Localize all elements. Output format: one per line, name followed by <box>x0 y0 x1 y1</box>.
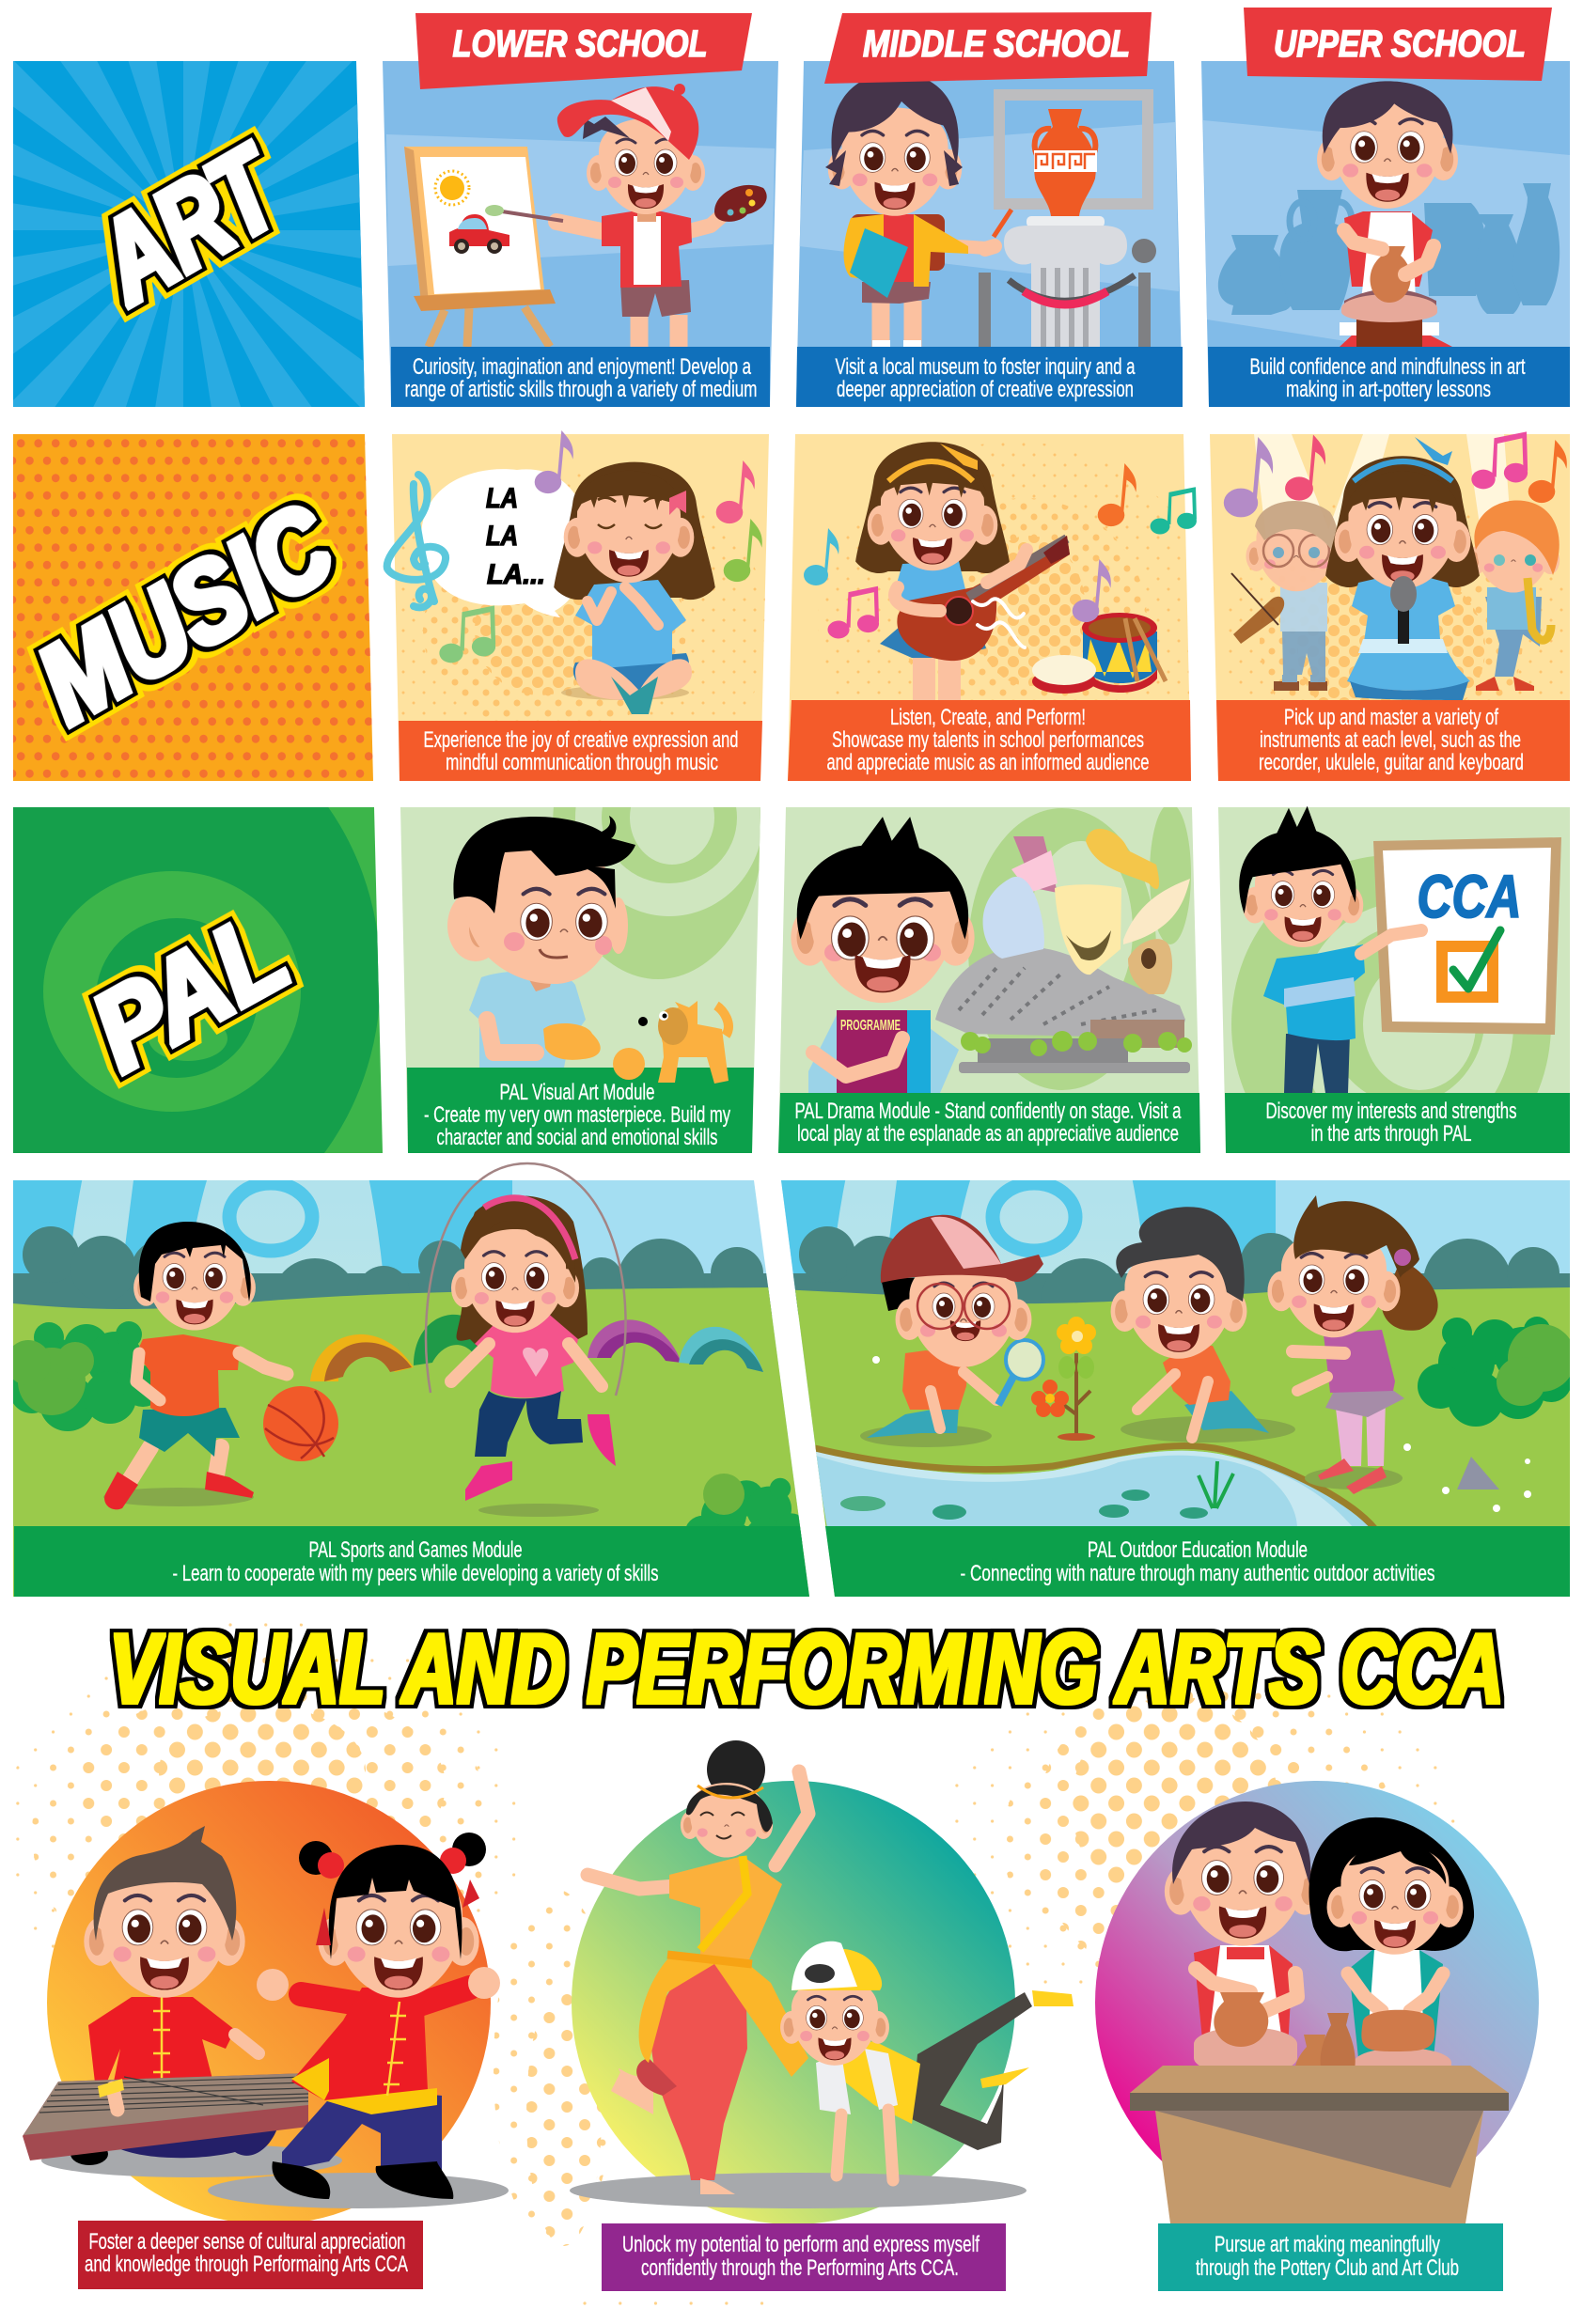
caption: PAL outdoor education: PAL Outdoor Education Module <box>1088 1537 1308 1563</box>
caption: middle school art: deeper appreciation of creative expression <box>837 377 1134 402</box>
figure: singing girl <box>554 462 715 714</box>
panel: PAL outdoor education <box>781 1180 1570 1597</box>
icon: speech bubble LA LA LA: LA <box>486 483 518 514</box>
caption: PAL sports and games: PAL Sports and Games Module <box>308 1537 523 1563</box>
icon: easel with painting <box>404 147 556 347</box>
caption: cultural appreciation: Foster a deeper sense of cultural appreciation <box>88 2229 406 2254</box>
figure: boy with clay <box>447 816 635 1068</box>
figure: girl skipping rope <box>426 1163 626 1517</box>
figure: boy with magnifier <box>860 1215 1043 1447</box>
banner: lower school: LOWER SCHOOL <box>453 23 707 65</box>
panel: pottery club <box>1062 1781 1560 2291</box>
figure: boy with programme <box>791 817 975 1093</box>
panel: PAL drama <box>776 803 1204 1155</box>
panel: lower school art <box>376 13 780 407</box>
figure: boy painting <box>485 84 767 350</box>
icon: clay dog and ball <box>613 1001 729 1084</box>
caption: cultural appreciation <box>78 2221 423 2289</box>
figure: boy with basketball <box>103 1222 338 1509</box>
heading: ART: ART <box>74 119 306 330</box>
figure: boy with saxophone <box>1467 500 1559 691</box>
panel: music instruments <box>1208 431 1579 789</box>
caption: pottery club: Pursue art making meaningfully <box>1215 2232 1440 2257</box>
icon: plant with flowers <box>1031 1317 1096 1441</box>
caption: PAL sports and games <box>14 1526 809 1597</box>
caption: cultural appreciation: and knowledge through Performaing Arts CCA <box>85 2252 408 2277</box>
panel: middle school art <box>794 12 1184 407</box>
caption: performing arts potential <box>602 2223 1006 2291</box>
caption: PAL visual art: PAL Visual Art Module <box>500 1080 654 1105</box>
caption: PAL drama: local play at the esplanade as an appreciative audience <box>797 1121 1179 1146</box>
icon: treble clef <box>387 475 446 607</box>
icon: drum and tambourine <box>1032 613 1166 694</box>
caption: PAL sports and games: - Learn to cooperate with my peers while developing a variety of skills <box>173 1561 658 1586</box>
heading: PAL: PAL <box>71 887 307 1096</box>
panel: MUSIC <box>13 434 373 781</box>
banner: upper school <box>1244 8 1552 81</box>
caption: pottery club: through the Pottery Club and Art Club <box>1196 2255 1459 2281</box>
icons: music notes <box>804 463 1197 638</box>
heading: MUSIC: MUSIC <box>17 479 354 748</box>
figure: boy with folder <box>825 72 1011 348</box>
caption: music perform: Showcase my talents in school performances <box>832 727 1144 753</box>
figure: boy with violin <box>1231 501 1347 691</box>
icon: pottery vases and table <box>1062 2013 1560 2237</box>
panel: upper school art <box>1199 8 1575 407</box>
caption: PAL drama <box>778 1093 1200 1153</box>
panel: ART <box>13 61 365 407</box>
figure: boy with programme: PROGRAMME <box>840 1018 901 1034</box>
caption: lower school art: Curiosity, imagination and enjoyment! Develop a <box>413 354 751 380</box>
panel: PAL <box>13 807 383 1153</box>
icon: esplanade and masks <box>935 829 1192 1073</box>
banner: middle school: MIDDLE SCHOOL <box>863 23 1130 65</box>
figure: breakdancing boy <box>780 1942 1074 2180</box>
icons: music notes <box>439 430 762 663</box>
icons: music notes <box>1224 431 1567 517</box>
panel: PAL sports and games <box>13 1162 809 1597</box>
caption: middle school art <box>796 347 1183 407</box>
caption: PAL visual art <box>407 1068 754 1153</box>
caption: music perform: and appreciate music as an informed audience <box>827 750 1149 775</box>
icon: speech bubble LA LA LA: LA <box>486 521 518 552</box>
banner: upper school: UPPER SCHOOL <box>1274 23 1526 65</box>
caption: pottery club <box>1158 2223 1503 2291</box>
caption: lower school art: range of artistic skills through a variety of medium <box>404 377 758 402</box>
banner: lower school <box>415 13 752 89</box>
caption: music perform: Listen, Create, and Perform! <box>890 705 1086 730</box>
caption: upper school art: making in art-pottery lessons <box>1286 377 1491 402</box>
caption: PAL discover: in the arts through PAL <box>1310 1121 1472 1146</box>
chart board: CCA checklist: CCA <box>1418 863 1521 930</box>
figure: boy making pottery <box>1317 81 1458 347</box>
caption: performing arts potential: Unlock my potential to perform and express myself <box>622 2232 980 2257</box>
icon: silhouette vases <box>1218 183 1559 315</box>
caption: PAL outdoor education <box>825 1526 1570 1597</box>
banner: middle school <box>824 12 1152 84</box>
caption: middle school art: Visit a local museum to foster inquiry and a <box>835 354 1136 380</box>
background: halftone dots <box>4 1621 1459 2318</box>
caption: PAL visual art: character and social and emotional skills <box>436 1125 718 1150</box>
panel: performing arts dance <box>570 1740 1074 2291</box>
caption: music experience: mindful communication through music <box>446 750 718 775</box>
caption: music experience: Experience the joy of creative expression and <box>423 727 739 753</box>
figure: boy pointing <box>1230 803 1421 1093</box>
caption: music perform <box>788 700 1191 781</box>
caption: PAL visual art: - Create my very own masterpiece. Build my <box>424 1102 730 1128</box>
icon: museum vase and column <box>979 89 1156 347</box>
panel: music experience <box>357 430 771 789</box>
caption: performing arts potential: confidently through the Performing Arts CCA. <box>641 2255 959 2281</box>
icons: play tunnels <box>310 1315 763 1381</box>
figure: kneeling boy <box>1111 1207 1295 1443</box>
panel: performing arts guzheng <box>23 1781 509 2289</box>
figure: girl in red jacket <box>208 1833 509 2208</box>
caption: upper school art <box>1208 347 1570 407</box>
chart board: CCA checklist <box>1373 837 1561 1035</box>
panel: music perform <box>785 434 1213 799</box>
figure: girl with hair clip <box>1267 1195 1438 1494</box>
figure: girl with guitar <box>855 442 1070 700</box>
figure: boy playing guzheng <box>41 1826 342 2177</box>
caption: music experience <box>399 721 762 781</box>
caption: music instruments <box>1216 700 1570 781</box>
icon: speech bubble LA LA LA <box>421 469 588 617</box>
figure: classical dancer <box>588 1740 808 2194</box>
caption: PAL drama: PAL Drama Module - Stand confidently on stage. Visit a <box>795 1099 1182 1124</box>
figure: girl at potter's wheel <box>1309 1817 1474 2096</box>
panel: PAL visual art <box>400 807 760 1153</box>
caption: PAL discover <box>1225 1093 1570 1153</box>
icon: speech bubble LA LA LA: LA... <box>487 559 545 590</box>
figure: girl with microphone <box>1325 437 1480 700</box>
icon: guzheng <box>23 2073 308 2160</box>
figure: boy at potter's wheel <box>1165 1801 1321 2086</box>
caption: lower school art <box>391 347 770 407</box>
panel: PAL discover <box>1218 806 1570 1153</box>
